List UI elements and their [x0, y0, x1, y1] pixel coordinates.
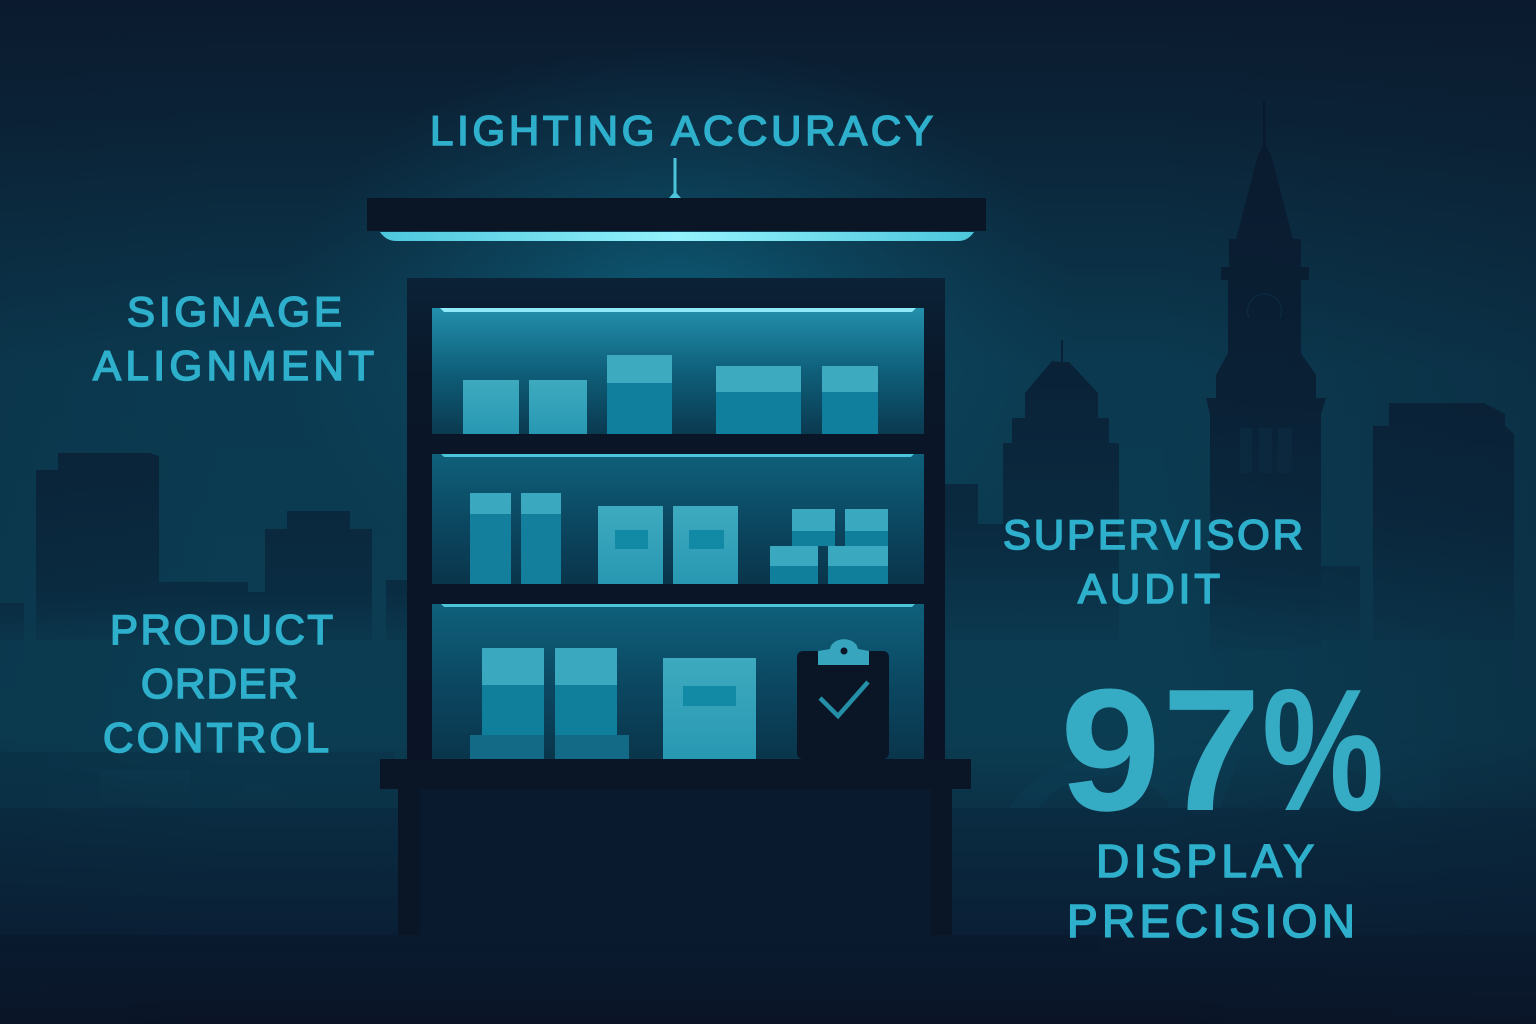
stat: 97%: 9 [1060, 652, 1161, 847]
counter top [380, 759, 971, 789]
label: product order control [103, 606, 333, 761]
label: display precision [1067, 835, 1355, 947]
label: signage alignment: SIGNAGE [127, 288, 342, 335]
clock tower [1206, 100, 1326, 650]
shelf 2 [432, 454, 924, 584]
building: block right [1373, 403, 1514, 640]
lamp housing [367, 198, 986, 231]
label: display precision: PRECISION [1067, 895, 1355, 947]
heading: lighting accuracy: LIGHTING ACCURACY [430, 107, 933, 154]
label: display precision: DISPLAY [1096, 835, 1314, 887]
lamp light strip [380, 232, 974, 241]
label: supervisor audit: SUPERVISOR [1003, 511, 1303, 558]
city skyline right [945, 100, 1514, 650]
stat: 97%: 7 [1162, 652, 1261, 847]
building: stepped tower [1003, 340, 1119, 640]
shelf 3 [432, 604, 924, 759]
label: product order control: ORDER [141, 660, 298, 707]
stat: 97%: % [1262, 652, 1384, 847]
lamp stem [669, 158, 681, 198]
label: supervisor audit [1003, 511, 1303, 612]
display shelf unit [380, 278, 971, 935]
label: product order control: CONTROL [103, 714, 329, 761]
shelf frame [407, 278, 945, 760]
building: low annex [1321, 566, 1360, 640]
water band [0, 808, 1536, 953]
stat: 97% [1060, 652, 1384, 847]
label: supervisor audit: AUDIT [1078, 565, 1220, 612]
label: signage alignment: ALIGNMENT [93, 342, 374, 389]
counter base [398, 789, 952, 935]
city skyline left [0, 453, 407, 640]
lamp [367, 158, 986, 241]
shelf 1 [432, 308, 924, 434]
icon: clipboard with check [797, 639, 889, 759]
label: product order control: PRODUCT [110, 606, 333, 653]
bridge silhouette [0, 745, 1440, 808]
label: signage alignment [93, 288, 374, 389]
building: low block [945, 484, 1003, 640]
